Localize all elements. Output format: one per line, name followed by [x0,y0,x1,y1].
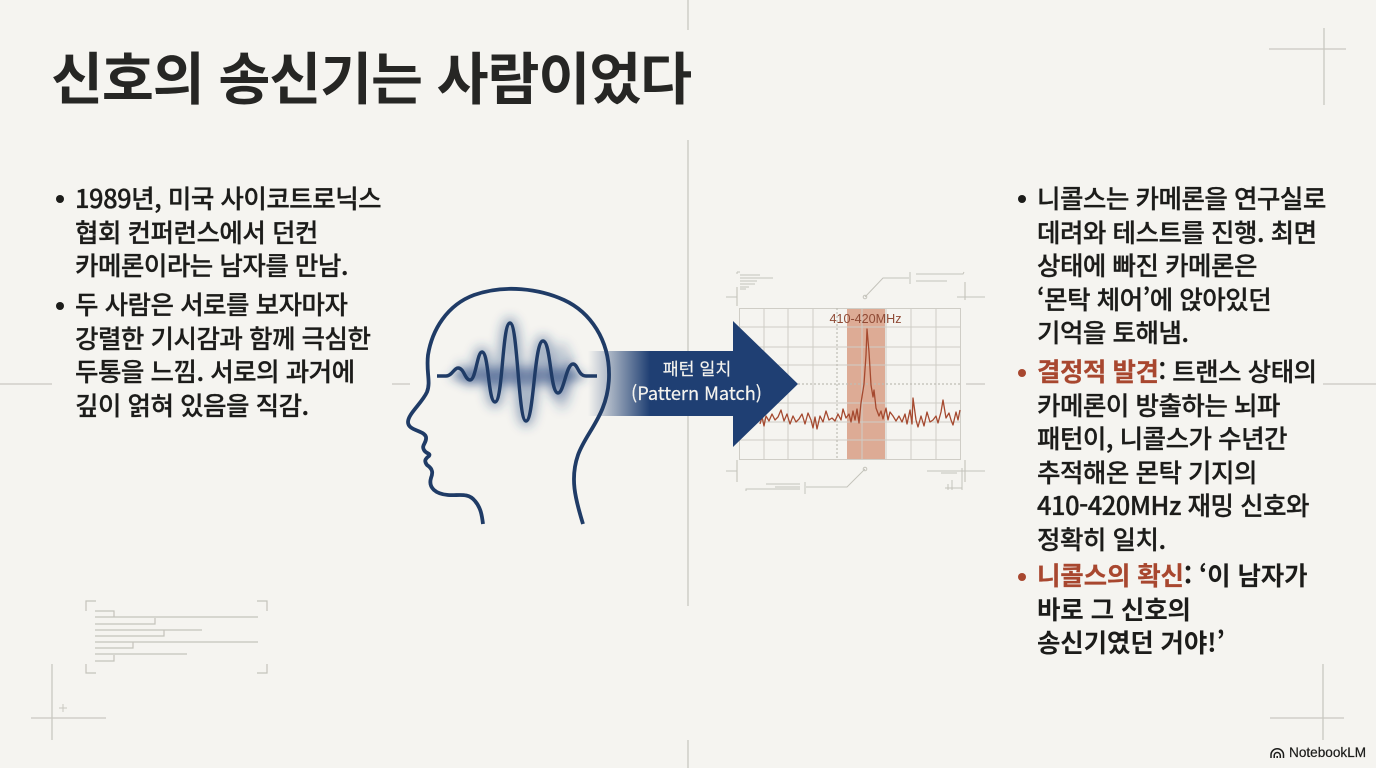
bullet: Nichols's conviction [1018,556,1307,660]
bullet: meeting at conference: 협회 컨퍼런스에서 던컨 [75,213,318,250]
icon: head outline [408,289,609,524]
chart annotations [726,272,985,494]
arrow: pattern match: 패턴 일치 [663,355,731,380]
bullet: meeting at conference: 카메론이라는 남자를 만남. [75,246,348,283]
bullet: deja vu and headache: 두통을 느낌. 서로의 과거에 [75,352,355,389]
bullet: Nichols's conviction: 바로 그 신호의 [1037,590,1191,627]
logo: NotebookLM: NotebookLM [1289,745,1366,760]
bullet: decisive discovery: 추적해온 몬탁 기지의 [1037,453,1257,490]
bullet: decisive discovery [1018,352,1317,557]
bullet: decisive discovery: 결정적 발견: 트랜스 상태의 [1037,352,1317,389]
left text column [56,179,381,423]
bullet: decisive discovery: 패턴이, 니콜스가 수년간 [1037,419,1287,456]
bullet: Nichols tests Cameron: 기억을 토해냄. [1037,313,1189,350]
bullet: Nichols tests Cameron [1018,179,1326,350]
highlighted frequency band [847,308,885,459]
bullet: decisive discovery: 카메론이 방출하는 뇌파 [1037,386,1280,423]
title: 신호의 송신기는 사람이었다 [51,34,691,116]
decoration: bracketed data lines [86,601,267,673]
bullet: deja vu and headache [56,285,370,423]
bullet: decisive discovery: 410-420MHz 재밍 신호와 [1037,486,1309,523]
arrow: pattern match [588,321,798,447]
arrow: pattern match: (Pattern Match) [631,380,762,406]
bullet: deja vu and headache: 강렬한 기시감과 함께 극심한 [75,319,370,356]
bullet: meeting at conference [56,179,381,283]
bullet: Nichols's conviction: 니콜스의 확신: ‘이 남자가 [1037,556,1307,593]
spectrum line [760,329,960,429]
bullet: Nichols tests Cameron: ‘몬탁 체어’에 앉아있던 [1037,280,1271,317]
bullet: deja vu and headache: 두 사람은 서로를 보자마자 [75,285,347,322]
bullet: Nichols's conviction: 송신기였던 거야!’ [1037,623,1225,660]
bullet: decisive discovery: 정확히 일치. [1037,520,1166,557]
bullet: Nichols tests Cameron: 상태에 빠진 카메론은 [1037,246,1257,283]
bullet: deja vu and headache: 깊이 얽혀 있음을 직감. [75,386,309,423]
bullet: meeting at conference: 1989년, 미국 사이코트로닉스 [75,179,381,216]
icon: brain wave line [437,323,597,421]
icon: brain wave glow [450,323,586,421]
right text column [1018,179,1326,660]
bullet: Nichols tests Cameron: 니콜스는 카메론을 연구실로 [1037,179,1326,216]
bullet: Nichols tests Cameron: 데려와 테스트를 진행. 최면 [1037,213,1317,250]
chart label: 410-420MHz [829,312,902,326]
